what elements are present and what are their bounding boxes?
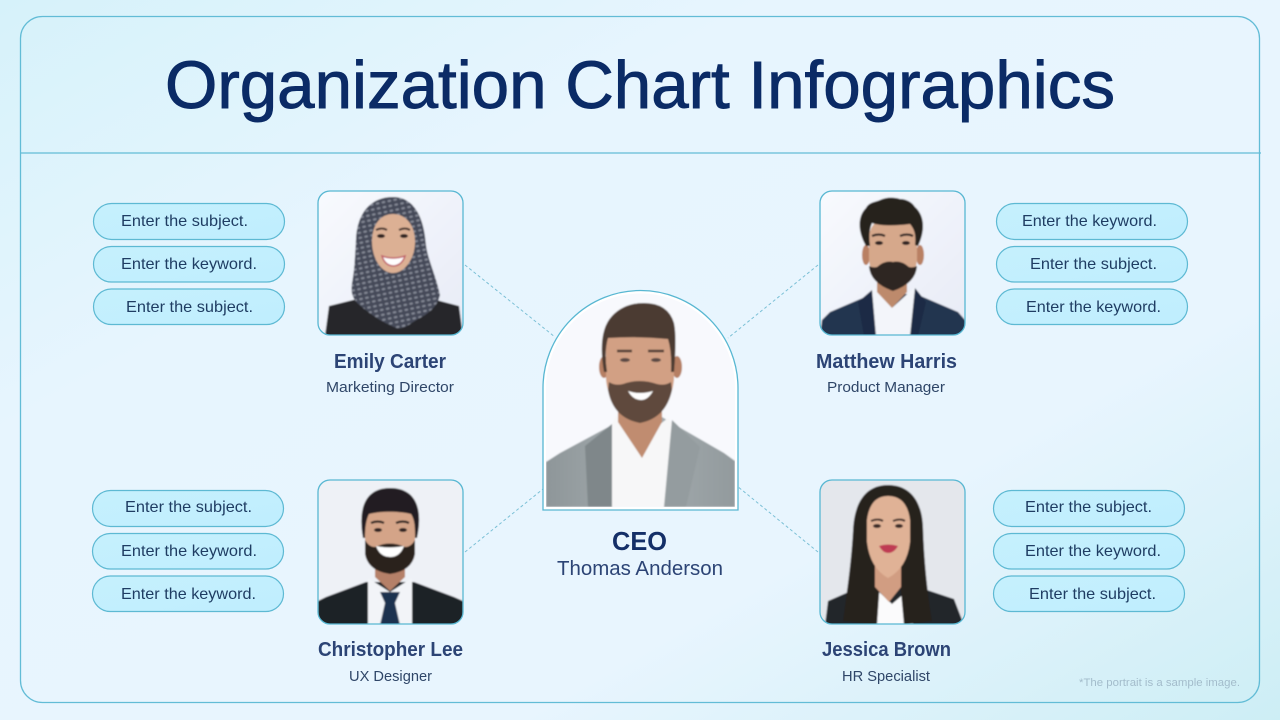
connectors: dashed lines — [465, 265, 818, 552]
portrait: Jessica Brown — [820, 480, 965, 625]
portrait: Emily Carter — [318, 191, 463, 336]
keyword pills: Emily Carter: Enter the keyword. — [121, 256, 257, 273]
keyword pills: Matthew Harris: Enter the keyword. — [1026, 299, 1161, 316]
keyword pills: Jessica Brown — [994, 490, 1184, 612]
name: Emily Carter: Emily Carter — [334, 351, 446, 373]
keyword pills: Christopher Lee: Enter the keyword. — [121, 543, 257, 560]
footnote: *The portrait is a sample image. — [1079, 677, 1240, 689]
label: CEO name: Thomas Anderson — [557, 558, 723, 580]
keyword pills: Jessica Brown: Enter the subject. — [1029, 586, 1156, 603]
role: Marketing Director: Marketing Director — [326, 379, 454, 396]
keyword pills: Matthew Harris — [996, 204, 1188, 324]
role: HR Specialist: HR Specialist — [842, 668, 931, 685]
keyword pills: Emily Carter — [94, 204, 284, 324]
title: Organization Chart Infographics — [165, 48, 1115, 123]
keyword pills: Jessica Brown: Enter the subject. — [1025, 499, 1152, 516]
panel: CEO — [540, 288, 740, 580]
panel: Jessica Brown — [820, 480, 1184, 685]
portrait: Christopher Lee — [318, 480, 463, 629]
panel: Matthew Harris — [816, 191, 1188, 396]
name: Christopher Lee: Christopher Lee — [318, 639, 463, 661]
keyword pills: Emily Carter: Enter the subject. — [121, 213, 248, 230]
keyword pills: Matthew Harris: Enter the keyword. — [1022, 213, 1157, 230]
portrait: Matthew Harris — [820, 191, 965, 336]
label: CEO title: CEO — [612, 526, 667, 556]
panel: Emily Carter — [94, 191, 463, 396]
header divider — [20, 152, 1261, 154]
panel: Christopher Lee — [92, 480, 463, 685]
keyword pills: Christopher Lee: Enter the subject. — [125, 499, 252, 516]
role: Product Manager: Product Manager — [827, 379, 945, 396]
name: Jessica Brown: Jessica Brown — [822, 639, 951, 661]
name: Matthew Harris: Matthew Harris — [816, 351, 957, 373]
keyword pills: Emily Carter: Enter the subject. — [126, 299, 253, 316]
keyword pills: Jessica Brown: Enter the keyword. — [1025, 543, 1161, 560]
keyword pills: Matthew Harris: Enter the subject. — [1030, 256, 1157, 273]
portrait: CEO — [540, 288, 740, 513]
keyword pills: Christopher Lee — [92, 490, 284, 612]
role: UX Designer: UX Designer — [349, 668, 432, 685]
keyword pills: Christopher Lee: Enter the keyword. — [121, 586, 256, 603]
